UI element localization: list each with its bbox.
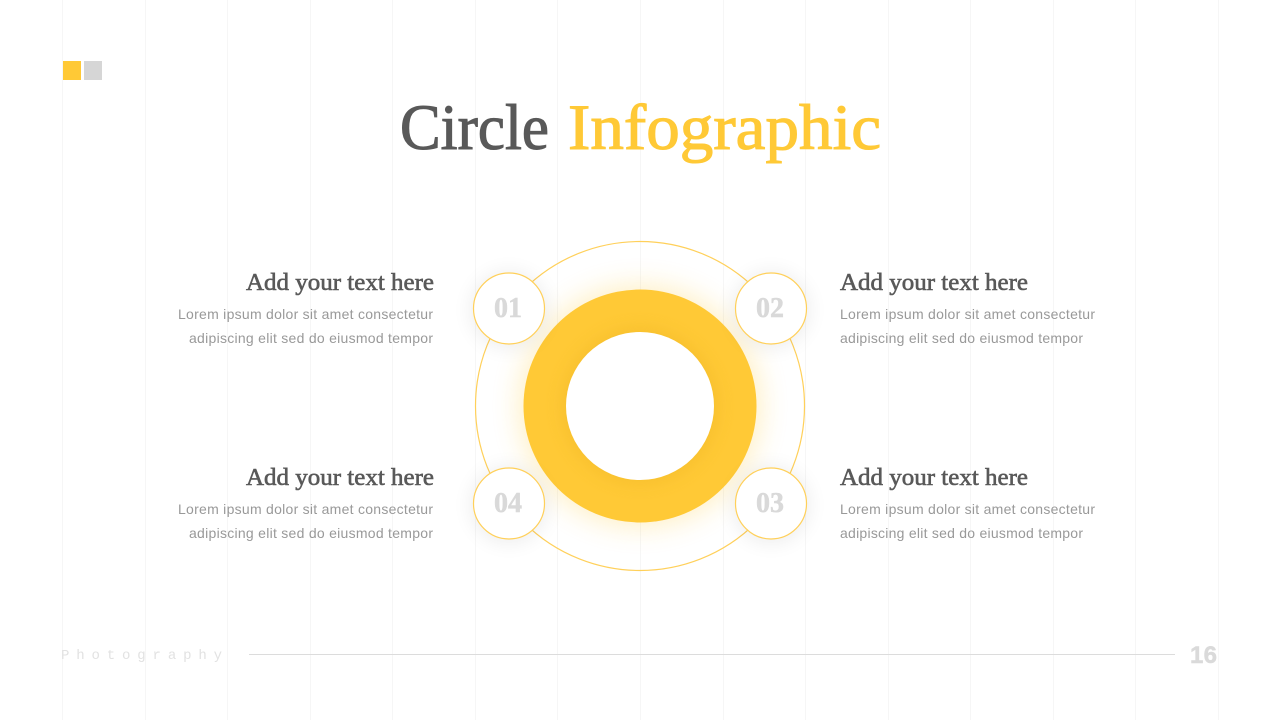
text block: bottom right — [840, 465, 1095, 541]
badge 02: 02 — [756, 293, 784, 324]
badge 04: 04 — [494, 488, 522, 519]
badge 04 — [471, 467, 547, 543]
text block: top left — [178, 270, 434, 346]
text block: top right: Lorem ipsum dolor sit amet consectetur — [840, 306, 1095, 322]
text block: bottom right: Add your text here — [840, 465, 1028, 491]
badge 01: 01 — [494, 293, 522, 324]
circle diagram — [471, 242, 809, 570]
text block: bottom right: adipiscing elit sed do eiusmod tempor — [840, 525, 1083, 541]
text block: top left: adipiscing elit sed do eiusmod tempor — [189, 330, 433, 346]
text block: bottom right: Lorem ipsum dolor sit amet consectetur — [840, 501, 1095, 517]
yellow ring glow — [520, 286, 760, 526]
badge 01 — [471, 272, 547, 348]
page number: 16 — [1190, 642, 1217, 669]
title: Infographic — [568, 92, 881, 164]
badge 03 — [733, 467, 809, 543]
text block: top left: Lorem ipsum dolor sit amet consectetur — [178, 306, 433, 322]
text block: bottom left: adipiscing elit sed do eiusmod tempor — [189, 525, 433, 541]
badge 03: 03 — [756, 488, 784, 519]
text block: bottom left: Add your text here — [246, 465, 434, 491]
icon: corner squares — [63, 61, 102, 80]
outer ring — [476, 242, 804, 570]
badge 02 — [733, 272, 809, 348]
yellow donut — [524, 290, 756, 522]
text block: top right: adipiscing elit sed do eiusmod tempor — [840, 330, 1083, 346]
title: Circle — [400, 92, 549, 164]
donut centre — [566, 332, 714, 480]
text block: bottom left: Lorem ipsum dolor sit amet consectetur — [178, 501, 433, 517]
footer label: Photography — [61, 648, 222, 664]
donut inner shadow — [561, 327, 719, 485]
text block: top left: Add your text here — [246, 270, 434, 296]
title — [400, 92, 881, 164]
text block: top right: Add your text here — [840, 270, 1028, 296]
text block: bottom left — [178, 465, 434, 541]
text block: top right — [840, 270, 1095, 346]
